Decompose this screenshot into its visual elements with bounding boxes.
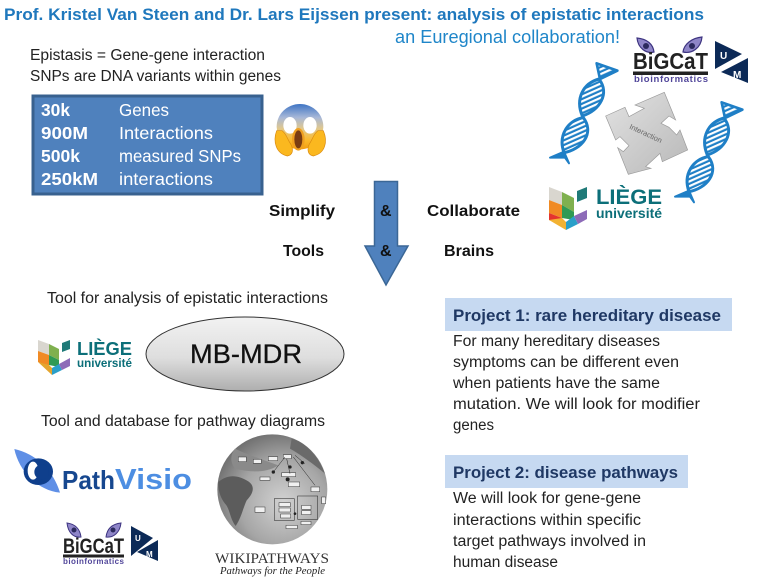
heading: tool for analysis: Tool for analysis of epistatic interactions bbox=[47, 290, 328, 307]
intro text bbox=[30, 47, 281, 85]
logo: WikiPathways globe: Pathways for the People bbox=[219, 565, 325, 577]
panel: project 2 bbox=[445, 455, 688, 571]
keyword labels: & bbox=[380, 203, 392, 220]
logo: BiGCaT and UM top bbox=[633, 37, 748, 85]
logo: Liege lower bbox=[38, 338, 132, 375]
icon: DNA helix right bbox=[675, 102, 742, 202]
subtitle: an Euregional collaboration! bbox=[395, 27, 620, 47]
panel: numbers box: measured SNPs bbox=[119, 146, 241, 166]
panel: numbers box: Genes bbox=[119, 100, 169, 120]
icon: DNA helix left bbox=[550, 63, 617, 163]
logo: BiGCaT and UM top: bioinformatics bbox=[634, 74, 708, 85]
panel: numbers box: 30k bbox=[41, 100, 70, 120]
keyword labels bbox=[269, 203, 520, 260]
logo: PathVisio: Visio bbox=[115, 464, 192, 496]
icon: interaction puzzle arrows bbox=[606, 92, 688, 174]
panel: project 1: mutation. We will look for modifier bbox=[453, 396, 700, 413]
intro text: Epistasis = Gene-gene interaction bbox=[30, 47, 265, 64]
logo: Liege top bbox=[549, 186, 662, 230]
logo: BiGCaT and UM top: BiGCaT bbox=[633, 48, 708, 74]
panel: numbers box bbox=[33, 96, 262, 194]
logo: BiGCaT and UM top: M bbox=[733, 70, 741, 81]
panel: project 2: We will look for gene-gene bbox=[453, 490, 641, 507]
logo: Liege top: université bbox=[596, 205, 662, 221]
intro text: SNPs are DNA variants within genes bbox=[30, 68, 281, 85]
panel: project 2: interactions within specific bbox=[453, 512, 641, 529]
logo: BiGCaT and UM lower bbox=[63, 523, 158, 566]
logo: BiGCaT and UM lower: BiGCaT bbox=[63, 535, 124, 558]
icon: interaction puzzle arrows: Interaction bbox=[628, 122, 664, 145]
title: Prof. Kristel Van Steen and Dr. Lars Eijssen present: analysis of epistatic interactions bbox=[4, 6, 704, 24]
logo: PathVisio: Path bbox=[62, 465, 115, 495]
panel: numbers box: 900M bbox=[41, 123, 88, 143]
logo: WikiPathways globe: WIKIPATHWAYS bbox=[215, 551, 329, 567]
logo: BiGCaT and UM lower: bioinformatics bbox=[63, 557, 125, 566]
arrow: down bbox=[365, 182, 408, 285]
panel: numbers box: 500k bbox=[41, 146, 80, 166]
panel: project 1: when patients have the same bbox=[452, 375, 660, 392]
logo: BiGCaT and UM lower: U bbox=[135, 534, 141, 543]
panel: project 1 bbox=[445, 298, 732, 434]
icon: screaming face emoji bbox=[275, 104, 325, 156]
MB-MDR ellipse bbox=[146, 317, 344, 391]
panel: numbers box: interactions bbox=[119, 169, 213, 189]
panel: project 1: For many hereditary diseases bbox=[453, 333, 660, 350]
panel: project 1: symptoms can be different even bbox=[453, 354, 679, 371]
panel: project 2: Project 2: disease pathways bbox=[453, 464, 678, 482]
heading: tool and database: Tool and database for pathway diagrams bbox=[41, 413, 325, 430]
keyword labels: Collaborate bbox=[427, 203, 520, 220]
logo: BiGCaT and UM top: U bbox=[720, 51, 727, 62]
MB-MDR ellipse: MB-MDR bbox=[190, 339, 302, 369]
logo: BiGCaT and UM lower: M bbox=[146, 550, 153, 559]
keyword labels: Simplify bbox=[269, 203, 335, 220]
keyword labels: Tools bbox=[283, 243, 324, 260]
panel: numbers box: 250kM bbox=[41, 169, 98, 189]
logo: WikiPathways globe bbox=[215, 434, 329, 577]
keyword labels: Brains bbox=[444, 243, 494, 260]
logo: PathVisio bbox=[14, 449, 192, 496]
panel: project 1: Project 1: rare hereditary disease bbox=[453, 307, 721, 325]
panel: numbers box: Interactions bbox=[119, 123, 213, 143]
logo: Liege top: LIÈGE bbox=[596, 186, 662, 209]
logo: Liege lower: LIÈGE bbox=[77, 338, 132, 359]
keyword labels: & bbox=[380, 243, 392, 260]
panel: project 2: human disease bbox=[453, 554, 558, 571]
panel: project 2: target pathways involved in bbox=[453, 533, 646, 550]
panel: project 1: genes bbox=[453, 417, 494, 434]
logo: Liege lower: université bbox=[77, 356, 132, 370]
